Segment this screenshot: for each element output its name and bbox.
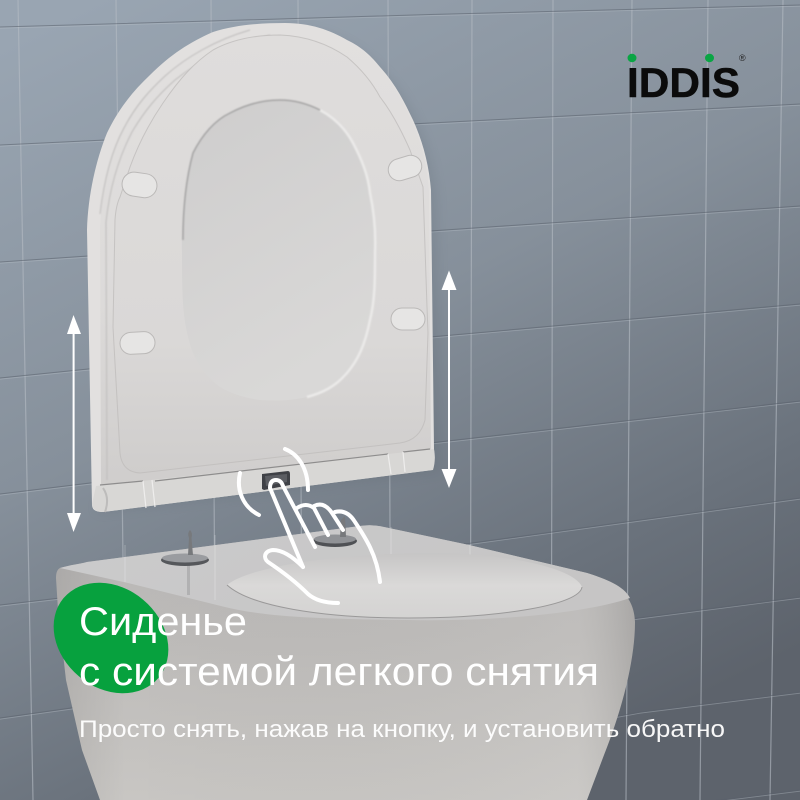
up-down arrow right: [442, 270, 456, 488]
seat shadow on wall: [96, 28, 440, 512]
bumper bottom left: [119, 331, 156, 355]
hand press icon: [239, 449, 380, 603]
toilet body shading: [56, 525, 635, 800]
window opening: [182, 100, 375, 401]
window top shadow: [183, 100, 320, 240]
logo wordmark: IDDIS: [627, 59, 740, 106]
hinge bar: [92, 449, 435, 512]
registered mark: ®: [739, 53, 746, 63]
toilet bowl: [56, 525, 635, 800]
logo dot right: [705, 54, 714, 62]
press arc left: [239, 473, 259, 515]
bumper top left: [121, 171, 159, 199]
bumper bottom right: [391, 308, 425, 330]
heading: с системой легкого снятия: [79, 650, 599, 694]
brand logo: [627, 53, 746, 106]
subheading: Просто снять, нажав на кнопку, и установить обратно: [79, 716, 725, 743]
seat front plate: [100, 26, 431, 490]
index finger: [270, 480, 315, 567]
ring finger: [314, 505, 343, 530]
press arc right: [285, 449, 308, 490]
toilet top surface: [60, 525, 630, 620]
little finger and palm: [335, 511, 380, 582]
bowl opening: [227, 553, 582, 618]
thumb: [265, 550, 338, 603]
heading: [79, 600, 599, 694]
seat outer lid: [87, 23, 435, 512]
seat inner recess: [113, 35, 428, 473]
wall reflections on top surface: [125, 527, 470, 600]
middle finger: [297, 505, 328, 535]
up-down arrow left: [67, 315, 81, 532]
logo dot left: [628, 54, 636, 62]
release button: [262, 471, 290, 490]
heading: Сиденье: [79, 600, 247, 644]
right hinge pin: [313, 516, 357, 547]
green blob: [31, 560, 191, 716]
window rim: [307, 110, 375, 397]
bumper top right: [386, 153, 424, 183]
seat lid edge lines: [100, 30, 270, 480]
toilet seat: [87, 23, 435, 512]
toilet body: [56, 525, 635, 800]
left hinge pin: [161, 530, 209, 595]
